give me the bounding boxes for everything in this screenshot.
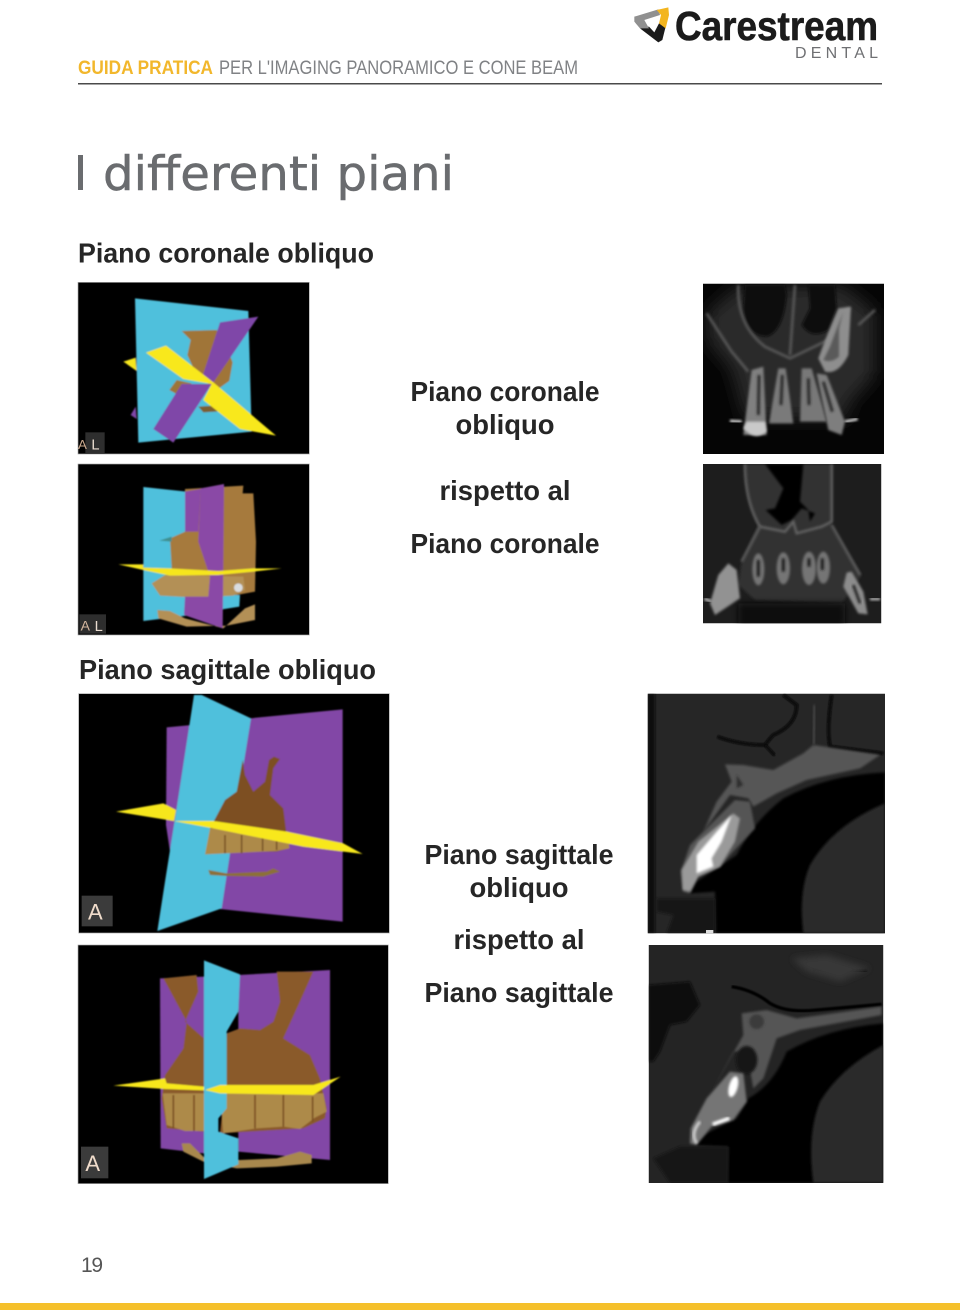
label line: rispetto al [454,924,584,955]
title: differenti piani [103,147,454,202]
3D view: sagittal oblique planes: A [88,900,103,925]
logo subline: DENTAL [795,45,878,62]
label line: Piano sagittale [424,839,614,870]
CT scan: oblique sagittal [648,694,885,933]
3D view: coronal reference planes [78,464,309,635]
logo wordmark: Carestream [675,3,878,49]
label line: rispetto al [440,475,570,506]
label line: obliquo [456,409,554,440]
text block: coronal comparison [410,376,600,559]
header: running title: GUIDA PRATICA [78,58,213,79]
3D view: sagittal oblique planes [79,694,389,933]
label line: obliquo [470,872,568,903]
panel: sagittal group 3D views [78,694,389,1184]
heading: Piano sagittale obliquo: Piano sagittale obliquo [79,654,376,685]
logo: Carestream Dental [634,3,878,62]
3D view: coronal reference planes: A [81,617,91,633]
3D view: coronal reference planes: L [95,619,103,635]
CT scan: oblique coronal [703,284,884,454]
footer band [0,1303,960,1310]
page number: 19 [81,1254,103,1277]
panel: sagittal CT scans [648,694,885,1183]
panel: coronal group 3D views [78,282,309,635]
3D view: coronal oblique planes: L [91,438,99,454]
panel: coronal CT scans [703,284,884,627]
header: running subtitle: PER L'IMAGING PANORAMICO E CONE BEAM [219,58,578,79]
3D view: coronal oblique planes [78,282,309,454]
heading: Piano coronale obliquo: Piano coronale obliquo [78,238,374,268]
3D view: sagittal reference planes: A [85,1151,100,1176]
CT scan: reference sagittal [649,945,883,1183]
CT scan: reference coronal [703,464,881,627]
icon: logo triangle [634,7,669,42]
3D view: sagittal reference planes [78,945,388,1184]
label line: Piano coronale [410,528,600,559]
3D view: coronal oblique planes: A [78,437,87,452]
label line: Piano coronale [410,376,600,407]
label line: Piano sagittale [424,977,614,1008]
text block: sagittal comparison [424,839,614,1008]
